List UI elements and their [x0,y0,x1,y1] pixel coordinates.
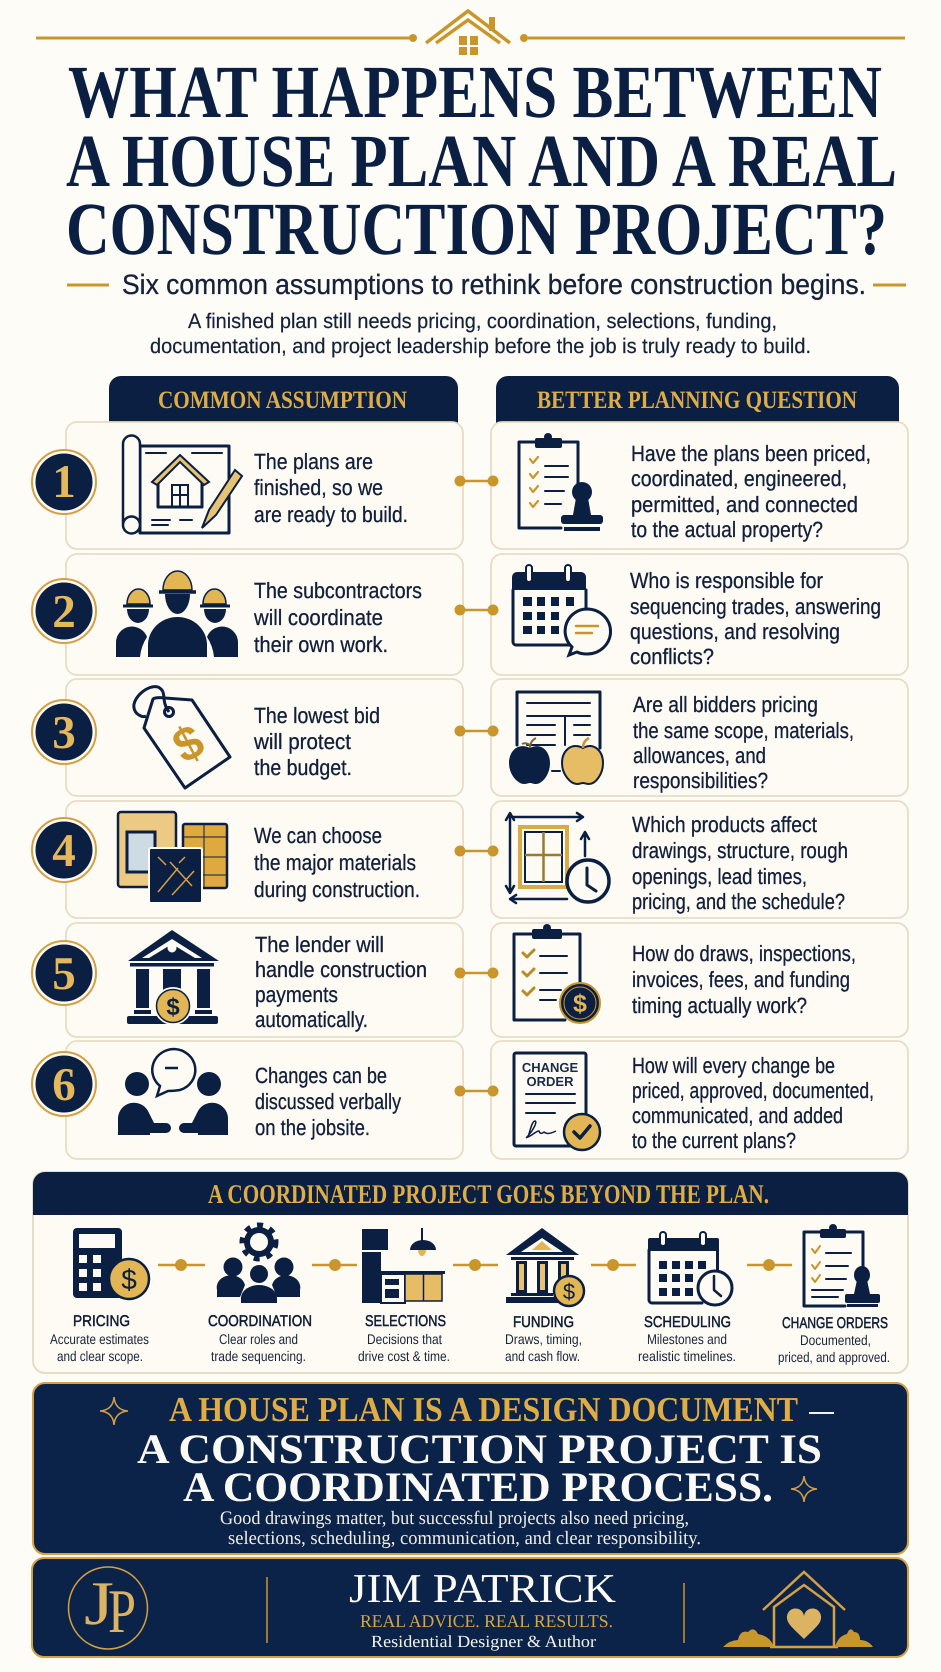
JP monogram: P [108,1578,136,1646]
icon: price tag with dollar sign [134,687,230,788]
takeaway white headline: A CONSTRUCTION PROJECT IS [137,1427,822,1473]
step 4 funding: Draws, timing, [505,1331,582,1347]
question text 3: Are all bidders pricing [633,692,818,717]
intro text [150,310,811,358]
step 3 selections [358,1313,450,1364]
takeaway body: selections, scheduling, communication, and clear responsibility. [228,1528,701,1549]
em dash [809,1412,834,1414]
assumption text 3: The lowest bid [254,703,380,728]
row 2 [32,554,908,675]
question text 4: openings, lead times, [632,864,807,889]
question text 6: communicated, and added [632,1103,843,1128]
connector [158,1259,205,1271]
connector 3 [454,726,498,736]
connector 1 [454,476,498,486]
assumption text 1: finished, so we [254,475,383,500]
takeaway white headline [137,1427,822,1511]
assumption text 6: Changes can be [255,1063,387,1088]
question text 4: drawings, structure, rough [632,838,848,863]
footer dividers [267,1577,684,1643]
assumption text 5: The lender will [255,932,384,957]
question text 1: permitted, and connected [631,492,858,517]
icon: material samples [118,812,227,903]
icon: calculator with coin [73,1228,149,1299]
footer [32,1558,908,1657]
author block: Residential Designer & Author [371,1632,596,1651]
step 5 scheduling: SCHEDULING [644,1314,731,1331]
row 4 [32,801,908,918]
column header: common assumption: COMMON ASSUMPTION [158,387,407,414]
icon: bank with dollar coin [127,930,219,1024]
assumption text 5: automatically. [255,1007,368,1032]
step 4 funding: and cash flow. [505,1348,580,1364]
step 1 pricing: PRICING [73,1313,130,1330]
question text 5: timing actually work? [632,993,807,1018]
JP monogram: J [84,1570,114,1638]
icon: price tag with dollar sign: $ [164,715,213,774]
top ornament: rule with house roof [36,11,905,55]
icon: change order form: ORDER [527,1074,574,1089]
icon: clipboard and stamp [519,433,603,531]
step 3 selections: Decisions that [367,1331,442,1347]
number badge 5: 5 [52,948,76,1000]
intro text: documentation, and project leadership before the job is truly ready to build. [150,335,811,358]
question text 3: the same scope, materials, [633,718,854,743]
question text 6: How will every change be [632,1053,835,1078]
assumption text 2: will coordinate [253,605,383,630]
connector 4 [454,846,498,856]
icon: three workers in hard hats [116,571,238,657]
takeaway gold line: A HOUSE PLAN IS A DESIGN DOCUMENT [169,1390,798,1429]
question text 2 [630,568,881,669]
step 3 selections: drive cost & time. [358,1348,450,1364]
icon: change order form [514,1053,600,1150]
panel: key takeaway [33,1383,908,1554]
number badge 5 [32,941,96,1005]
column header: better planning question: BETTER PLANNING QUESTION [537,387,857,414]
icon: two people talking [118,1049,228,1135]
question text 2: questions, and resolving [630,619,840,644]
house logo with heart [723,1572,873,1647]
icon: change order form: CHANGE [522,1060,578,1075]
question text 5 [632,941,856,1018]
assumption text 2: The subcontractors [254,578,422,603]
question text 5: How do draws, inspections, [632,941,856,966]
question text 1: Have the plans been priced, [631,441,871,466]
step 6 change orders: priced, and approved. [778,1349,890,1365]
icon: clipboard with dollar coin [514,924,600,1023]
assumption text 5 [255,932,427,1032]
icon: clipboard with stamp [804,1224,880,1307]
question text 2: conflicts? [630,644,714,669]
step 1 pricing [50,1313,149,1364]
question text 3 [633,692,854,793]
number badge 3 [32,700,96,764]
author block: REAL ADVICE. REAL RESULTS. [360,1611,613,1631]
question text 1 [631,441,871,542]
number badge 4: 4 [52,825,76,877]
question text 3: responsibilities? [633,768,768,793]
number badge 6: 6 [52,1059,76,1111]
assumption text 3 [253,703,380,780]
icon: blueprint, house and pencil [123,436,242,534]
question text 6: priced, approved, documented, [632,1078,874,1103]
row 6 [32,1041,908,1159]
assumption text 1: The plans are [254,449,373,474]
step 2 coordination: COORDINATION [208,1313,312,1330]
step 1 pricing: Accurate estimates [50,1331,149,1347]
connector 6 [454,1086,498,1096]
assumption text 4 [254,823,420,902]
intro text: A finished plan still needs pricing, coordination, selections, funding, [188,310,777,333]
author block: JIM PATRICK [349,1565,616,1611]
step 5 scheduling: Milestones and [647,1331,727,1347]
connector [591,1259,636,1271]
assumption text 2: their own work. [254,632,388,657]
author block [349,1565,616,1651]
step 4 funding [505,1314,582,1364]
icon: calculator with coin: $ [121,1264,137,1295]
connector [453,1259,498,1271]
icon: calendar with clock [648,1232,732,1305]
question text 4: pricing, and the schedule? [632,889,845,914]
panel banner [33,1172,908,1215]
connector 5 [454,968,498,978]
question text 5: invoices, fees, and funding [632,967,850,992]
assumption text 6 [255,1063,401,1140]
number badge 3: 3 [52,707,76,759]
step 3 selections: SELECTIONS [365,1313,446,1330]
JP monogram [68,1567,148,1649]
number badge 4 [32,818,96,882]
sparkle left [100,1397,128,1425]
icon: gear and team [217,1225,300,1303]
number badge 1: 1 [52,456,76,508]
step 6 change orders [778,1315,890,1365]
question text 3: allowances, and [633,743,766,768]
subtitle with gold dashes: Six common assumptions to rethink before construction begins. [122,269,866,300]
assumption text 4: during construction. [254,877,420,902]
step 1 pricing: and clear scope. [57,1348,143,1364]
row 1 [32,422,908,549]
panel banner: A COORDINATED PROJECT GOES BEYOND THE PLAN. [208,1179,769,1209]
assumption text 6: discussed verbally [255,1089,401,1114]
number badge 2: 2 [52,586,76,638]
assumption text 3: will protect [253,729,351,754]
assumption text 3: the budget. [254,755,352,780]
icon: bid document with two apples [509,692,603,784]
title [66,51,897,271]
assumption text 2 [253,578,422,657]
step 2 coordination: Clear roles and [219,1331,298,1347]
question text 6 [632,1053,874,1153]
sparkle right [791,1476,817,1502]
panel: coordinated project [33,1172,908,1373]
question text 4 [632,812,848,914]
column header: better planning question [496,376,899,424]
assumption text 6: on the jobsite. [255,1115,370,1140]
assumption text 4: We can choose [254,823,382,848]
step 5 scheduling [638,1314,736,1364]
step 5 scheduling: realistic timelines. [638,1348,736,1364]
icon: bank with dollar coin: $ [166,994,180,1021]
step 4 funding: FUNDING [513,1314,574,1331]
question text 1: coordinated, engineered, [631,466,847,491]
question text 6: to the current plans? [632,1128,796,1153]
assumption text 4: the major materials [254,850,416,875]
connector [747,1259,792,1271]
column header: common assumption [109,376,458,424]
step 6 change orders: Documented, [800,1332,871,1348]
takeaway body [220,1508,701,1549]
takeaway white headline: A COORDINATED PROCESS. [183,1465,773,1511]
assumption text 5: payments [255,982,338,1007]
number badge 1 [32,450,96,514]
step 2 coordination [208,1313,312,1364]
step 2 coordination: trade sequencing. [211,1348,306,1364]
step 6 change orders: CHANGE ORDERS [782,1315,888,1332]
row 3 [32,679,908,796]
assumption text 1: are ready to build. [254,502,408,527]
assumption text 5: handle construction [255,957,427,982]
icon: kitchen [362,1228,445,1303]
icon: calendar with speech bubble [512,565,611,655]
row 5 [32,923,908,1037]
icon: bank with coin: $ [563,1279,575,1304]
icon: bank with coin [506,1228,584,1306]
question text 1: to the actual property? [631,517,823,542]
icon: clipboard with dollar coin: $ [573,990,587,1018]
question text 2: sequencing trades, answering [630,594,881,619]
question text 4: Which products affect [632,812,817,837]
icon: window with dimensions and clock [506,813,609,903]
takeaway body: Good drawings matter, but successful projects also need pricing, [220,1508,689,1529]
connector 2 [454,604,498,616]
number badge 2 [32,579,96,643]
assumption text 1 [254,449,408,527]
question text 2: Who is responsible for [630,568,823,593]
number badge 6 [32,1052,96,1116]
connector [312,1259,357,1271]
